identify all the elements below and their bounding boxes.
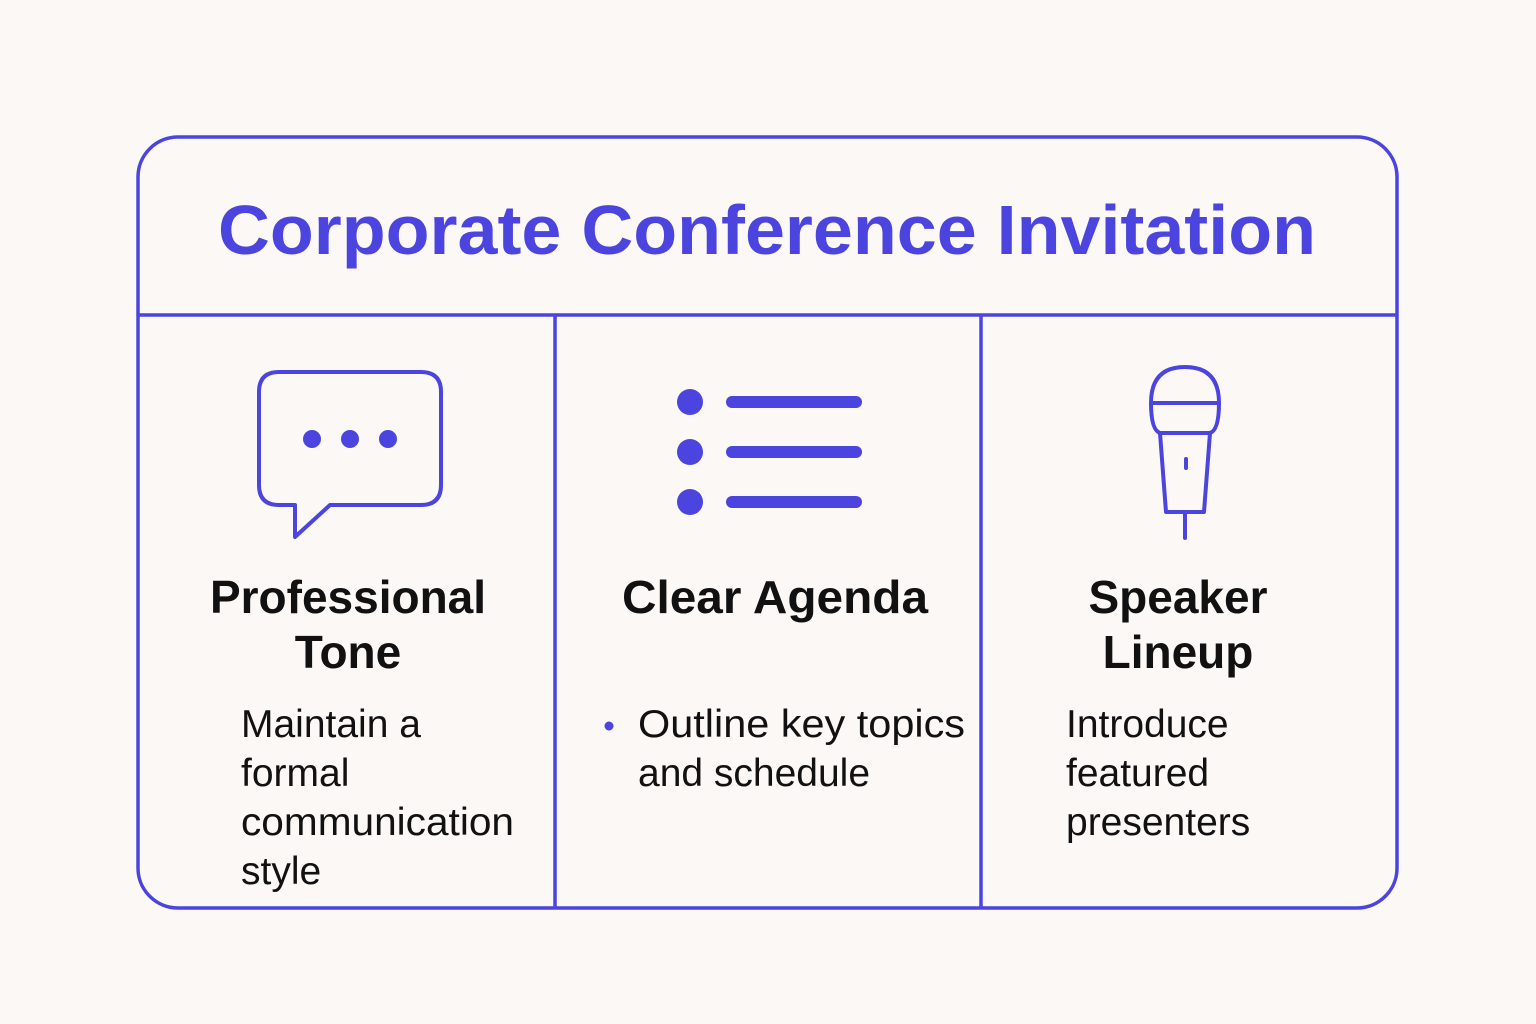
body text: Maintain a [241,703,421,746]
bullet text: and schedule [638,752,870,795]
heading: speaker lineup: Speaker [1088,571,1268,623]
panel: clear agenda [604,389,965,795]
heading: clear agenda: Clear Agenda [622,571,928,623]
heading: professional tone: Professional [210,571,486,623]
bullet text: Outline key topics [638,703,965,746]
heading: professional tone: Tone [295,626,401,678]
body text: communication [241,801,514,844]
bullet text [604,703,965,795]
title: Corporate Conference Invitation [218,191,1316,269]
body text: Introduce [1066,703,1229,746]
panel: professional tone [210,372,514,893]
body text: style [241,850,321,893]
panel: speaker lineup [1066,367,1268,844]
icon: microphone [1151,367,1219,538]
card frame [138,137,1397,908]
body text: featured [1066,752,1209,795]
body text: presenters [1066,801,1250,844]
body text: formal [241,752,349,795]
icon: list [677,389,856,515]
heading: speaker lineup: Lineup [1103,626,1253,678]
icon: speech bubble [259,372,441,537]
